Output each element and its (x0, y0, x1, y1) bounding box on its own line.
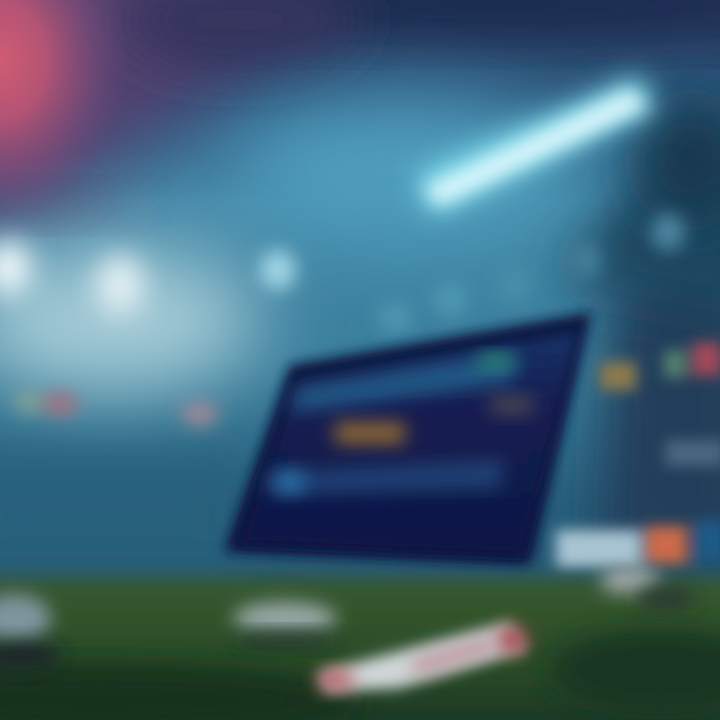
orange score right (490, 396, 534, 414)
orange score text (335, 422, 405, 444)
header bar (290, 352, 520, 412)
blue row (268, 460, 505, 494)
small figure right (600, 566, 695, 610)
tablet screen (224, 312, 592, 565)
sneaker left (0, 594, 62, 670)
sneaker front (315, 622, 528, 692)
light beam (415, 75, 655, 215)
blurred crowd colours left (16, 392, 218, 425)
grass field (0, 578, 720, 720)
screen panel (238, 332, 578, 556)
sneaker centre (233, 602, 337, 648)
green header accent (475, 354, 515, 368)
sky colour washes (0, 0, 720, 570)
stadium lights (0, 213, 685, 332)
blurred coloured boards right (556, 342, 720, 568)
blue highlight (274, 471, 306, 493)
